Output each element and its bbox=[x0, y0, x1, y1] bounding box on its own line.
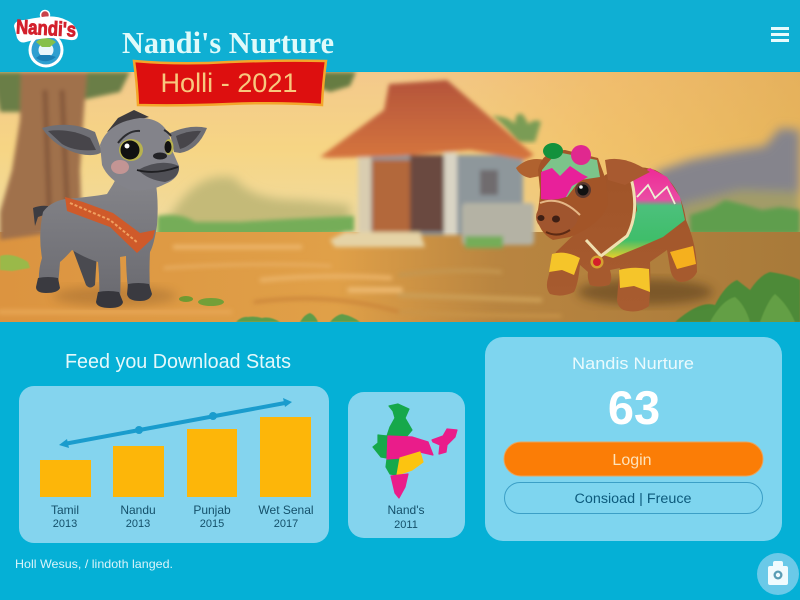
icon: menu bbox=[771, 27, 789, 42]
ground bbox=[0, 232, 800, 324]
card title: Nandis Nurture bbox=[572, 354, 694, 373]
map label: Nand's bbox=[388, 503, 424, 517]
logo: Nandi's: Nandi's bbox=[16, 16, 77, 42]
panel: India map bbox=[348, 392, 465, 538]
foreground plants bbox=[0, 255, 800, 322]
illustration: village scene bbox=[0, 72, 800, 324]
map bbox=[373, 404, 457, 498]
hut bbox=[320, 80, 534, 248]
bar labels: 2013 bbox=[53, 518, 77, 530]
icon: camera button bbox=[757, 553, 799, 595]
login button: Login bbox=[612, 452, 652, 469]
bar labels: 2015 bbox=[200, 518, 224, 530]
bars bbox=[40, 417, 311, 497]
big number: 63 bbox=[608, 381, 660, 434]
bar labels: Tamil bbox=[51, 503, 79, 517]
secondary button bbox=[504, 482, 762, 514]
panel: bar chart bbox=[19, 386, 329, 543]
bar labels: 2013 bbox=[126, 518, 150, 530]
map label: 2011 bbox=[394, 519, 418, 531]
character: grey goat bbox=[33, 110, 207, 308]
bar labels: Punjab bbox=[193, 503, 231, 517]
header bar bbox=[0, 0, 800, 71]
trend arrow bbox=[59, 398, 292, 448]
heading: download stats: Feed you Download Stats bbox=[65, 351, 291, 373]
tree bbox=[0, 72, 356, 240]
bar labels: 2017 bbox=[274, 518, 298, 530]
panel: login card bbox=[485, 337, 782, 541]
background bushes bbox=[156, 198, 800, 232]
logo: Nandi's bbox=[14, 10, 78, 68]
leaves on ground bbox=[179, 296, 224, 306]
bar labels: Wet Senal bbox=[258, 503, 314, 517]
footnote: Holl Wesus, / lindoth langed. bbox=[15, 557, 173, 571]
map label bbox=[388, 503, 424, 531]
distant hills bbox=[165, 128, 800, 240]
banner: Holli 2021: Holli - 2021 bbox=[160, 68, 298, 98]
login button bbox=[504, 442, 763, 476]
title: Nandi's Nurture bbox=[122, 25, 334, 60]
palm tree bbox=[492, 114, 541, 142]
bar labels bbox=[51, 503, 314, 530]
banner: Holli 2021 bbox=[134, 61, 326, 105]
sky bbox=[0, 72, 800, 242]
bar labels: Nandu bbox=[120, 503, 156, 517]
secondary button: Consioad | Freuce bbox=[574, 491, 692, 506]
character: brown calf bbox=[516, 143, 713, 311]
